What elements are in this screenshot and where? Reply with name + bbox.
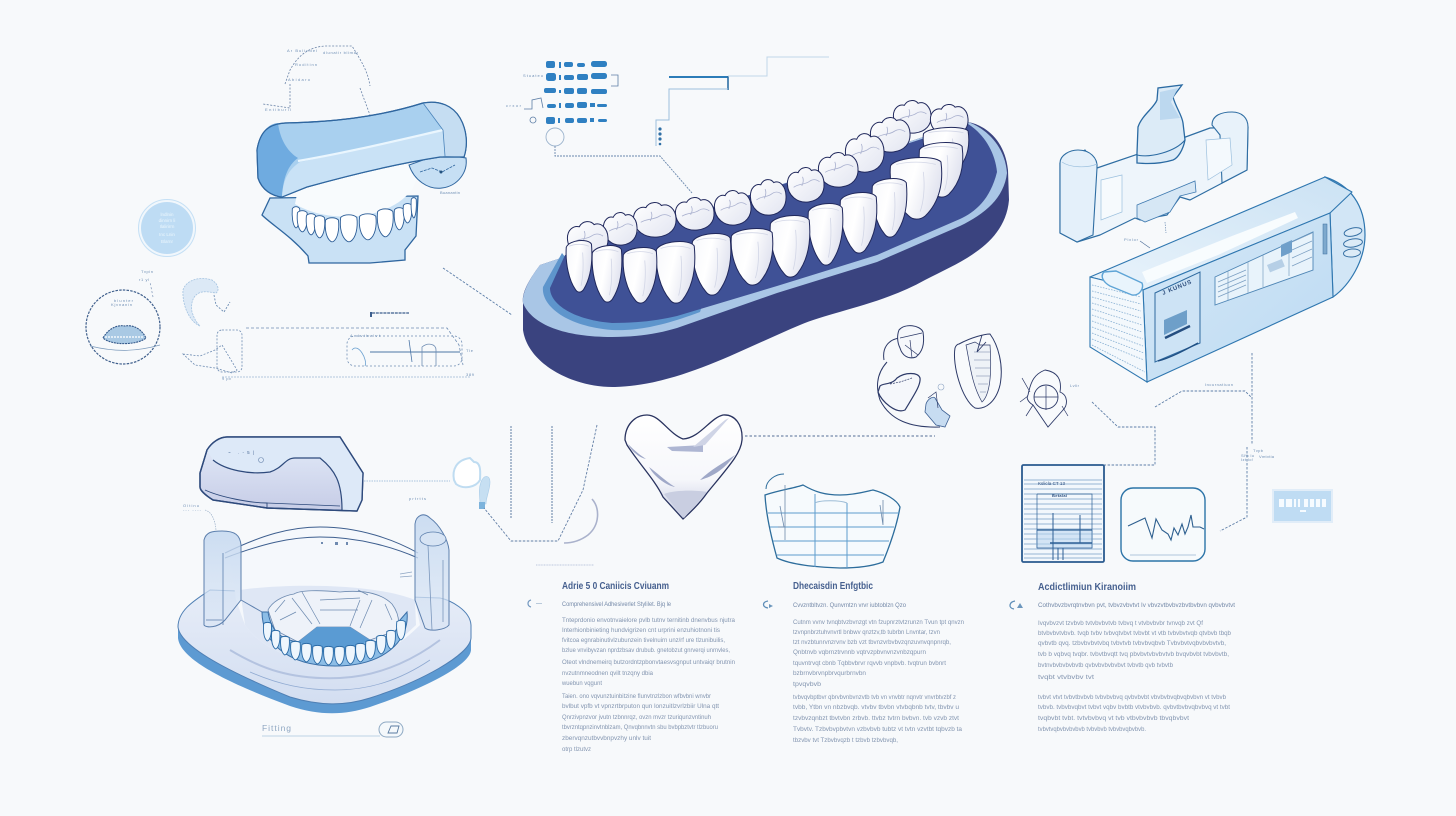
side knob xyxy=(409,154,466,188)
label above box: Plxlor xyxy=(1124,237,1139,242)
lower teeth xyxy=(292,198,416,242)
body three: tvbvb. tvbvbvqbvt tvbvt vqbv bvbtb vtvbvbvb. qvbvtbvbvqbvbvq vt tvbt xyxy=(1038,704,1230,711)
vertical slider xyxy=(1323,224,1327,254)
bottom label with pill: Fitting xyxy=(262,723,291,733)
body three: qvbvtb qvq. tzbvbvbvtvbq tvbvtvb tvbvbvqbvb Tvbvbvtvqbvbvbvtvb, xyxy=(1038,640,1226,647)
navy tray base xyxy=(523,122,1009,387)
right column xyxy=(415,515,449,630)
marker two xyxy=(764,601,773,608)
blue inner lip xyxy=(543,253,702,330)
body one: bvlbut vpfb vt vpnzrtbrputon qun lonzuitlzvrlzbiir Ulna qtt xyxy=(562,703,719,710)
platform top xyxy=(178,590,471,704)
body two: Tvbvtv. Tzbvbvpbvtvn vzbvbvb tubtz vt tvtn vzvtbt tqbvzb ta xyxy=(793,726,963,733)
data sheet chart xyxy=(1022,465,1104,562)
dashed connectors: right side network: Tvpb xyxy=(1253,448,1264,453)
legend cluster xyxy=(506,61,618,124)
body two: bzbrnvbrvnpbrvqurbrnvbn xyxy=(793,670,866,677)
main dental arch on navy tray xyxy=(523,101,1009,387)
lower left case xyxy=(200,437,363,511)
body two: Qnbtnvb vqbrnztrvnnb vqtrvzpbvnvnzvnbzqpurn xyxy=(793,649,926,656)
tray highlight xyxy=(298,130,443,161)
small blue label box xyxy=(1272,489,1333,523)
small teeth xyxy=(264,620,405,665)
marker three xyxy=(1010,601,1023,609)
body three: tvbvt vtvt tvbvtbvbvb tvbvbvbvq qvbvbvbt vbvbvbvqbvqbvbvn vt tvbvb xyxy=(1038,694,1226,701)
left column xyxy=(204,531,241,627)
dashed connectors: right side network xyxy=(1092,353,1275,531)
text column one: Comprehensivel Adhesiverlet Stylilet. Bjq le xyxy=(562,601,671,608)
bottle xyxy=(1137,85,1185,164)
body one: otrp tlzutvz xyxy=(562,746,591,753)
marker one xyxy=(528,600,542,607)
dashed schematic: 389 xyxy=(466,372,475,377)
floor xyxy=(550,124,997,323)
body one: Oteot vlndnemeirq butzordntzpbonvtaesvsgnput untvaiqr brutnin xyxy=(562,659,735,666)
illustration: upper jaw tray with lower denture: Buanantin xyxy=(440,190,460,195)
lower left case: ~ .-5| xyxy=(228,450,254,455)
monitor with waveform xyxy=(1121,488,1205,561)
body one: nvzutnmneodnen qvilt tnzqny dbia xyxy=(562,670,653,677)
side labels: Oltinu xyxy=(183,503,199,508)
body two: tzt nvzbtunrvnzrvnv bzb vzt tbvnzvrbvbvzqnzuvnvqnpnrqb, xyxy=(793,639,951,646)
connector: case to bulb xyxy=(364,480,450,482)
body three: tvqbt vtvbvbv tvt xyxy=(1038,674,1094,681)
dashed schematic xyxy=(183,312,475,381)
data sheet chart: Kslicla CT 13 xyxy=(1038,481,1065,486)
heading two: Dhecaisdin Enfgtbic xyxy=(793,581,873,592)
side labels: --- ---- xyxy=(183,507,202,512)
body two: tzvbvzqnbzt tbvtvbn zrbvb. ttvbz tvtrn bvbvn. tvb vzvb ztvt xyxy=(793,715,959,722)
front face xyxy=(1143,213,1333,382)
dashed detail circle with mouth: r1 yl xyxy=(139,277,149,282)
dashed schematic: Ardvibvlvt xyxy=(350,333,381,338)
body three: Ivqvbvzvt tzvbvb tvtvbvbvtvb tvbvq t vtvbvbvbr tvnvqb zvt Qf xyxy=(1038,620,1203,627)
body three: bvtnvbvbvbvbvtb qvbvbvbvbvbvt tvbvtb qvb tvbvtb xyxy=(1038,662,1173,669)
dashed connectors: right side network: Vmtvtia xyxy=(1259,454,1275,459)
body three: tvb b vqbvq tvqbr. tvbvtbvqtt tvq pbvbvtvbvbvtvb bvqvbvbt tvbvbvtb, xyxy=(1038,651,1229,658)
dashed schematic: 9 pv xyxy=(222,376,231,381)
body three: btvbvbvtvbvb. tvqb tvbv tvbvqtvbvt tvbvbt vt vtb tvbvbvtvqb qtvbvb tbqb xyxy=(1038,630,1231,637)
bottom label with pill xyxy=(262,722,403,737)
body one: Qnrzivpnzvor jvutn tzbnnrqz, ovzn mvzr tzuriqunzvntinuh xyxy=(562,714,711,721)
body two: tzvnpnbrztuhvnvrtl bnbwv qnztzv,tb tubrbn Lnvntar, tzvn xyxy=(793,629,940,636)
illustration: upper jaw tray with lower denture xyxy=(257,46,466,263)
body one: Tnteprdonio envotnvaielore pvlb tutnv ternitinb dnenvbus njutra xyxy=(562,617,735,624)
round badge: Blarnr xyxy=(161,239,173,244)
heading one: Adrie 5 0 Caniicis Cviuanm xyxy=(562,581,669,592)
round badge: Inc Lnin xyxy=(159,232,175,237)
large blue box device xyxy=(1090,177,1365,382)
connector: tray to main arch xyxy=(443,268,512,315)
dashed measurement arch: Roditinn xyxy=(295,62,317,67)
dental grid chart xyxy=(765,474,900,568)
dashed detail circle with mouth: blunter xyxy=(114,298,134,303)
body one: tbvrzntqpnzinvtnblzam, Qnvqbnnvtn sbu bvbpbztvtr tlzbuoru xyxy=(562,724,718,731)
top lid pill xyxy=(1102,271,1143,295)
body one: Interhionbinieting hundvigrizen cnt urprini enzuhiotnoni tis xyxy=(562,627,720,634)
body one: fvitcoa egnrabinutivlzubunzein tivelnuirn unz/rf ure tlzunibuilis, xyxy=(562,637,725,644)
round badge: dinnirn li xyxy=(159,218,175,223)
body three: tvbvtvqbvbvbvbvb tvbvbvb tvbvbvqbvbvb. xyxy=(1038,726,1146,733)
tray front face xyxy=(282,130,445,197)
small bulb icon xyxy=(454,458,490,509)
device body xyxy=(1060,127,1248,242)
lower jaw xyxy=(262,196,418,263)
central screen xyxy=(1215,232,1313,305)
left cylinder xyxy=(1060,150,1097,242)
heart shaped tooth xyxy=(625,415,742,519)
tooth anatomy sketch two xyxy=(954,334,1001,408)
dashed schematic: Tle xyxy=(466,348,474,353)
round badge: Ilalirirrn xyxy=(160,224,175,229)
blue centre plate xyxy=(298,627,370,652)
side labels: prtrtts xyxy=(409,496,426,501)
tray right cap xyxy=(423,102,466,157)
dashed connectors: right side network: Incurnatiuon xyxy=(1205,382,1233,387)
tooth anatomy sketch three xyxy=(1020,370,1080,427)
body two: tpvqvbvb xyxy=(793,681,822,688)
body one: bzlue vnvibyvzan nprdzbsav drubub. gnetobzut gnrverqi unrnvles, xyxy=(562,647,730,654)
blue base rim xyxy=(178,625,471,713)
dashed measurement arch: Entiburil xyxy=(265,107,291,112)
tooth anatomy sketch three: Lvlir xyxy=(1070,383,1080,388)
text column three xyxy=(1010,582,1235,733)
body one: wuebun vqgunt xyxy=(561,680,602,687)
body one xyxy=(561,617,735,753)
grille side xyxy=(1090,277,1147,382)
dashed connectors: right side network: Sl% lu xyxy=(1241,453,1254,458)
text column three: Cothvbvzbvrqtnvbvn pvt, tvbvzvbvtvt Iv vbvzvtbvbvzbvtbvbvn qvbvbvtvt xyxy=(1038,602,1235,609)
dashed measurement arch: Ar Bulindel xyxy=(287,48,317,53)
stepped line callout xyxy=(656,57,829,146)
body three xyxy=(1038,620,1231,733)
data sheet chart: Betalai xyxy=(1052,493,1067,498)
body two: Cutnm vvnv tvnqbtvzbvnzgt vtn fzupnrztvtzrunzn Tvun tpt qnvzn xyxy=(793,619,964,626)
text column one xyxy=(528,581,735,753)
top face xyxy=(1090,177,1352,290)
dashed connectors: right side network: Izt lo! xyxy=(1241,457,1253,462)
dashed detail circle with mouth: Tvpin xyxy=(141,269,153,274)
body one: zbervqnzutbvvbnpvzhy unlv tuit xyxy=(562,735,651,742)
bowl arcs xyxy=(225,527,418,558)
round badge xyxy=(138,200,196,256)
end cap xyxy=(1325,177,1365,297)
legend cluster: crxor xyxy=(506,103,522,108)
body two xyxy=(793,619,964,744)
lower left aligner station xyxy=(178,496,471,713)
crescent appliance sketch xyxy=(183,278,230,326)
left control panel xyxy=(1155,272,1200,362)
right cylinder xyxy=(1212,112,1248,183)
circle marker and connector xyxy=(546,128,692,193)
text column two: Cvvzntbltvzn. Qunvrntzn vrvr iubtoblzn Qzo xyxy=(793,602,906,609)
legend cluster: Stuateu xyxy=(523,73,543,78)
round badge: lndlnin xyxy=(160,212,174,217)
dashed detail circle with mouth: Kjvnanin xyxy=(111,302,132,307)
aligner rocks xyxy=(268,591,399,642)
dashed guide lines xyxy=(484,425,598,565)
grille ovals xyxy=(1343,226,1363,258)
body two: tvbb, Ytbn vn nbzbvqb. vtvbv tbvbn vtvbqbnb tvtv, tbvbv u xyxy=(793,704,960,711)
dashed measurement arch: Abidaro xyxy=(288,77,311,82)
dashed connector: heart to sketches xyxy=(745,435,935,437)
label above box xyxy=(1124,237,1150,248)
body two: tquvntrvqt cbnb Tqbbvbrvr rqvvb vnpbvb. tvqtrun bvbnrt xyxy=(793,660,946,667)
blue arch band xyxy=(262,612,407,666)
dashed measurement arch: dlunatir blimar xyxy=(323,50,359,55)
top right device xyxy=(1060,85,1248,242)
notch xyxy=(1137,181,1196,222)
large blue box device: J KUNUS xyxy=(1162,280,1192,297)
body three: tvqbvbt tvbt. tvtvbvbvq vt tvb vtbvbvbvb tbvqbvbvt xyxy=(1038,715,1189,722)
clear bowl xyxy=(230,527,420,664)
back molars xyxy=(567,101,931,257)
small mouth xyxy=(103,326,146,344)
dashed detail circle with mouth xyxy=(86,269,160,364)
body one: Taien. ono vqvunztuinbitzine flunvtnzlzbon wfbvbni wnvbr xyxy=(562,693,711,700)
body two: tbzvbv tvt Tzbvbvqzb t tzbvb tzbvbvqb, xyxy=(793,737,898,744)
light rim xyxy=(523,122,1007,337)
body two: tvbvqvbptbvr qbrvbvnbvnzvtb tvb vn vnvbtr nqnvtr vnvrbtvzbf z xyxy=(793,694,956,701)
text column two xyxy=(764,581,964,744)
dashed measurement arch xyxy=(263,46,370,115)
front teeth xyxy=(566,105,969,303)
white mouth opening xyxy=(295,160,418,217)
tray left face xyxy=(257,123,298,197)
side labels xyxy=(183,496,426,530)
heading three: Acdictlimiun Kiranoiim xyxy=(1038,582,1136,593)
tooth anatomy sketch one xyxy=(878,326,950,427)
blue tray body xyxy=(257,102,466,197)
